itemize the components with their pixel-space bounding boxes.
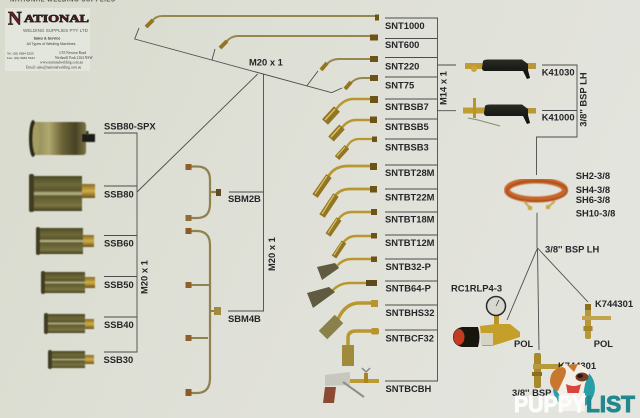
hose coil xyxy=(507,180,567,210)
label SNT600: SNT600 xyxy=(385,39,419,50)
label SNTBSB7: SNTBSB7 xyxy=(385,101,429,112)
label 3/8 BSP LH: 3/8'' BSP LH xyxy=(545,244,600,255)
label K41030: K41030 xyxy=(542,67,575,78)
company subtitle: WELDING SUPPLIES PTY LTD xyxy=(23,28,89,33)
adaptor lower xyxy=(532,353,563,388)
street address: 1/55 Newton Road xyxy=(59,51,86,55)
manifold labels xyxy=(228,193,261,324)
website: www.nationalwelding.com.au xyxy=(40,60,83,64)
label SNTBT18M: SNTBT18M xyxy=(385,214,435,224)
label POL adaptor: POL xyxy=(594,338,613,349)
label 3/8 BSP: 3/8'' BSP xyxy=(512,387,551,398)
label RC1RLP4-3: RC1RLP4-3 xyxy=(451,283,502,294)
label POL regulator: POL xyxy=(514,338,534,349)
label K744301 upper: K744301 xyxy=(595,298,633,309)
label SNTBT28M: SNTBT28M xyxy=(385,167,435,178)
torch SNTB32-P xyxy=(317,256,377,280)
label SNTBSB3: SNTBSB3 xyxy=(385,142,429,152)
burner SSB30 xyxy=(48,350,94,369)
phone number: Tel: (02) 9684 5255 xyxy=(7,52,34,56)
torch SNTBSB7 xyxy=(325,96,378,122)
torch SNT75 xyxy=(345,75,378,89)
label M20 x 1 manifolds: M20 x 1 xyxy=(266,237,277,271)
label SBM2B: SBM2B xyxy=(228,193,261,204)
label SBM4B: SBM4B xyxy=(228,313,261,324)
brazing tips xyxy=(307,96,379,403)
suburb: Wetherill Park 2164 NSW xyxy=(55,56,93,60)
company name: ATIONAL xyxy=(24,14,89,25)
label SNTB64-P: SNTB64-P xyxy=(386,282,431,294)
label SNT1000: SNT1000 xyxy=(385,20,425,31)
adaptor K744301 upper xyxy=(582,304,611,339)
label M20 x 1 burners: M20 x 1 xyxy=(138,260,150,294)
torch SNT600 xyxy=(220,34,378,48)
label SSB80: SSB80 xyxy=(104,189,134,200)
regulator xyxy=(453,296,520,347)
burners column xyxy=(29,120,95,369)
handle K41000 xyxy=(463,98,536,126)
handle K41030 xyxy=(465,60,536,79)
label SNTBHS32: SNTBHS32 xyxy=(386,307,434,318)
burner SSB80-SPX xyxy=(29,120,95,157)
torch SNTBT12M xyxy=(334,233,377,257)
label SNTB32-P: SNTB32-P xyxy=(386,261,431,272)
label SNT220: SNT220 xyxy=(385,60,419,72)
label K744301 lower: K744301 xyxy=(558,360,596,371)
sales and service text: Sales & Service xyxy=(34,36,60,40)
torch SNTBCF32 xyxy=(342,328,379,366)
label K41000: K41000 xyxy=(542,112,575,123)
torch SNT1000 xyxy=(146,14,379,27)
torch SNTBT18M xyxy=(328,209,377,235)
icon: dog in teal circle xyxy=(550,364,595,411)
label SSB40: SSB40 xyxy=(104,319,134,330)
torch SNTBSB5 xyxy=(331,116,377,139)
long torch tubes xyxy=(146,14,379,89)
watermark text LIST: LIST xyxy=(586,391,635,417)
company name initial: N xyxy=(8,8,22,30)
label 3/8 BSP LH rotated: 3/8'' BSP LH xyxy=(578,72,589,127)
label SH6-3/8: SH6-3/8 xyxy=(576,194,610,205)
burner SSB50 xyxy=(41,271,95,294)
logo card: National Welding Supplies xyxy=(5,8,93,71)
label SSB80-SPX: SSB80-SPX xyxy=(104,120,156,132)
burner SSB60 xyxy=(36,227,94,255)
burner labels xyxy=(104,120,156,365)
label SNTBT22M: SNTBT22M xyxy=(385,192,435,202)
machines text: All Types of Welding Machines xyxy=(27,42,76,46)
torch SNTBHS32 xyxy=(323,300,378,335)
label M14 x 1: M14 x 1 xyxy=(438,71,449,105)
torch SNT220 xyxy=(321,56,378,70)
label SNTBCBH: SNTBCBH xyxy=(386,383,432,394)
torch SNTBT22M xyxy=(322,186,377,216)
manifold SBM2B xyxy=(186,164,221,221)
manifold SBM4B xyxy=(186,228,221,396)
watermark logo: PuppyList xyxy=(514,364,635,417)
label SH2-3/8: SH2-3/8 xyxy=(576,170,610,181)
torch labels xyxy=(385,20,435,394)
hose labels xyxy=(576,170,615,219)
label SNTBCF32: SNTBCF32 xyxy=(386,333,434,344)
label SSB60: SSB60 xyxy=(104,238,134,249)
fax number: Fax: (02) 9684 5444 xyxy=(7,56,35,60)
connector lines xyxy=(104,18,588,381)
label SNT75: SNT75 xyxy=(385,80,414,90)
torch SNTB64-P xyxy=(307,280,377,308)
label SSB30: SSB30 xyxy=(104,354,133,365)
torch SNTBSB3 xyxy=(337,136,377,158)
label SH4-3/8: SH4-3/8 xyxy=(576,184,610,195)
handle labels xyxy=(542,67,575,123)
label SNTBSB5: SNTBSB5 xyxy=(385,121,429,132)
burner SSB40 xyxy=(44,313,94,334)
torch SNTBT28M xyxy=(315,163,377,196)
watermark text PUPPY: PUPPY xyxy=(514,391,586,417)
label M20 x 1 top: M20 x 1 xyxy=(249,57,283,68)
label SNTBT12M: SNTBT12M xyxy=(385,237,435,248)
label SSB50: SSB50 xyxy=(104,279,134,290)
label SH10-3/8: SH10-3/8 xyxy=(576,208,615,219)
torch SNTBCBH xyxy=(323,368,379,403)
burner SSB80 xyxy=(29,174,95,212)
email: Email: sales@nationalwelding.com.au xyxy=(26,66,82,70)
